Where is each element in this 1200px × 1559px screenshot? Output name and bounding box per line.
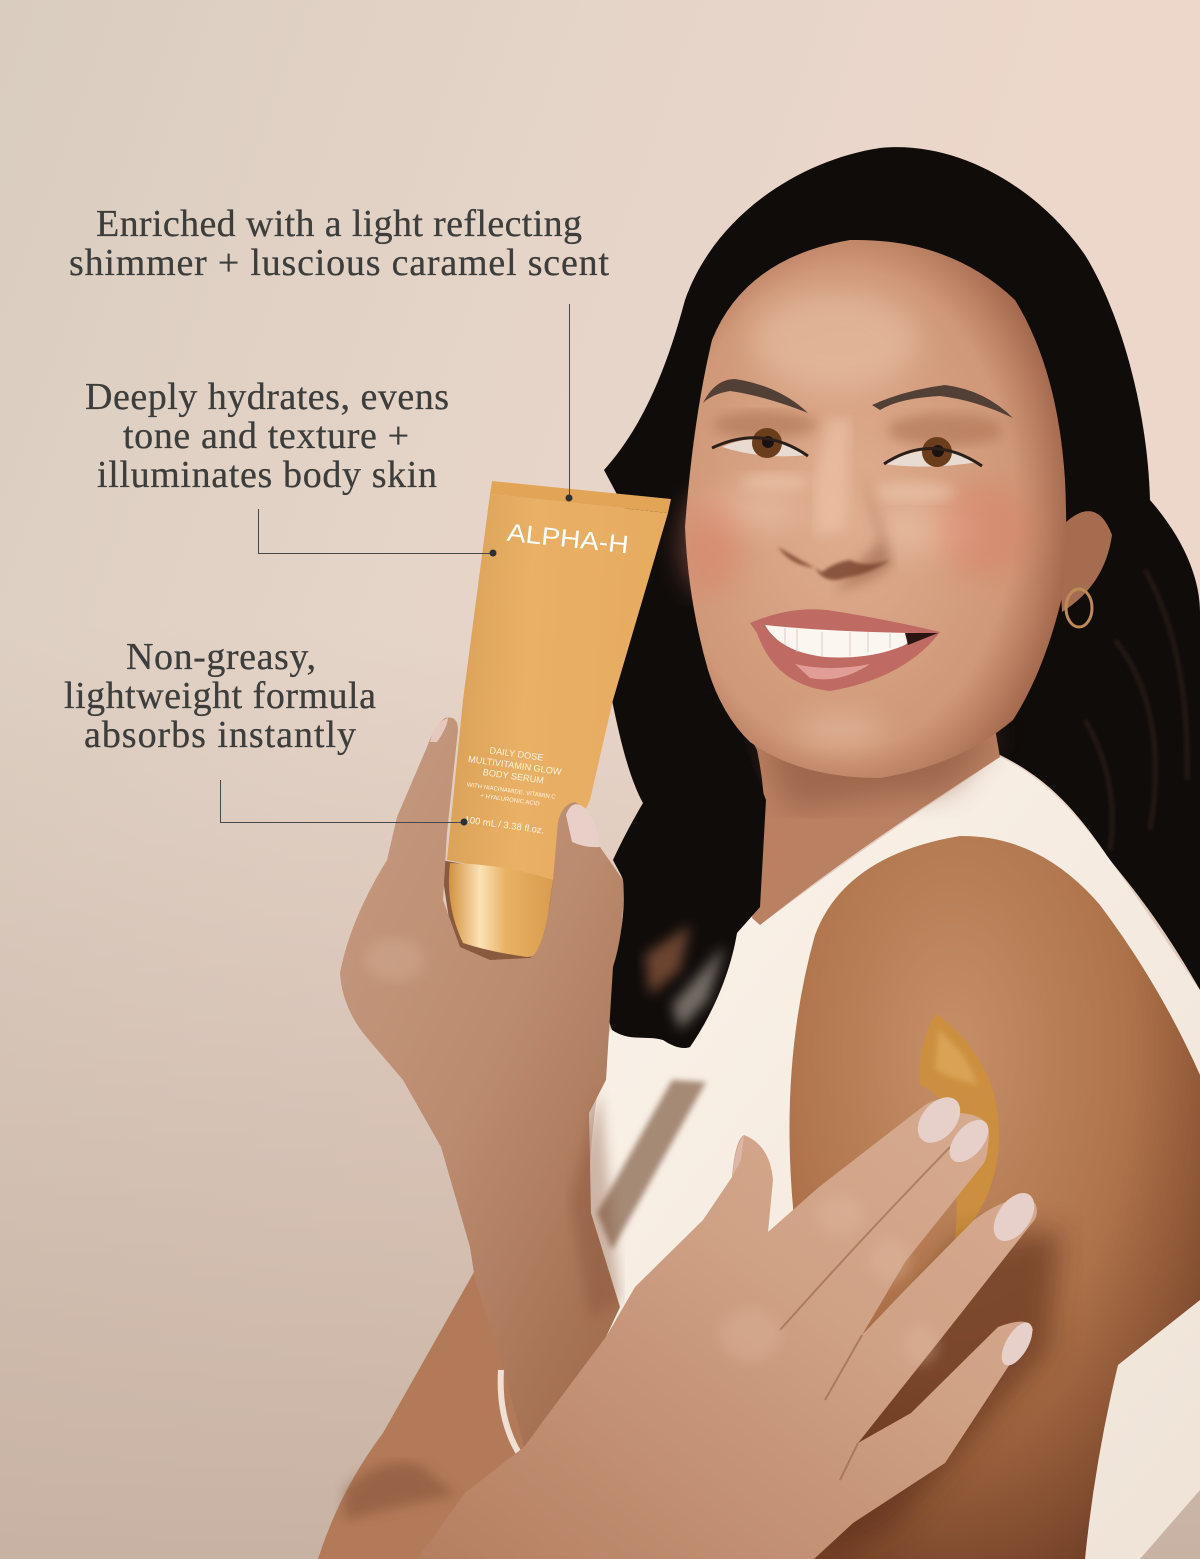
neck shadow	[760, 730, 1000, 810]
callout: hydration	[85, 376, 496, 556]
tube crimp	[490, 481, 671, 513]
hair strands over top	[645, 925, 725, 1030]
knuckle highlight	[365, 938, 425, 982]
under-eye light	[740, 473, 955, 502]
tube body	[447, 494, 668, 880]
product label: MULTIVITAMIN GLOW	[468, 754, 562, 777]
smile	[750, 609, 940, 691]
callout: formula: lightweight formula	[64, 675, 376, 717]
elbow crease	[345, 1463, 456, 1520]
upper arm lower left	[318, 1265, 545, 1559]
bracelet	[501, 1370, 520, 1455]
thumbnail	[566, 804, 600, 847]
callout: shimmer and scent: Enriched with a light reflecting	[96, 203, 582, 245]
callout: shimmer and scent	[69, 203, 609, 502]
serum swatch on arm	[920, 1014, 999, 1240]
white top	[588, 757, 1200, 1559]
wrist shadow	[570, 1090, 620, 1320]
product label: DAILY DOSE	[489, 745, 544, 763]
product label: + HYALURONIC ACID	[480, 793, 541, 808]
finger shadow lines	[780, 1147, 950, 1480]
eye sockets	[713, 411, 1003, 446]
eyebrows	[703, 379, 1013, 418]
product label: 100 mL / 3.38 fl.oz.	[464, 815, 545, 837]
callout: hydration: tone and texture +	[123, 415, 409, 457]
face highlights	[700, 290, 975, 745]
arm-touching hand	[417, 1089, 1043, 1559]
callout: formula	[64, 636, 468, 826]
shoulder and arm	[789, 836, 1200, 1559]
ear and earring	[1058, 511, 1112, 627]
neck	[725, 690, 1000, 925]
hair highlights	[1085, 570, 1187, 850]
callout: formula: absorbs instantly	[84, 714, 356, 756]
nose	[778, 420, 892, 590]
callout: formula: Non-greasy,	[126, 636, 316, 678]
fingernails	[909, 1089, 1043, 1370]
knuckle highlights	[720, 1195, 938, 1365]
cap shadow backing	[440, 860, 560, 965]
holding hand	[340, 718, 623, 1447]
brand name: ALPHA-H	[506, 519, 630, 559]
left eye	[712, 428, 808, 458]
right eye	[884, 437, 982, 467]
tube cap	[449, 863, 553, 957]
finger shadow on arm	[820, 1230, 1060, 1559]
back hair	[604, 147, 1200, 990]
index fingernail	[430, 718, 448, 742]
woman portrait	[318, 147, 1200, 1559]
product label: BODY SERUM	[482, 767, 544, 786]
cheek blush	[682, 482, 1035, 595]
product label	[459, 743, 564, 838]
front hair	[606, 690, 766, 1048]
face	[685, 240, 1066, 778]
callout: hydration: illuminates body skin	[97, 454, 437, 496]
swatch highlights	[935, 1030, 978, 1085]
top fold shadow	[597, 1080, 706, 1250]
callout: hydration: Deeply hydrates, evens	[85, 376, 449, 418]
thumb nail	[733, 1136, 744, 1175]
callout: shimmer and scent: shimmer + luscious caramel scent	[69, 242, 609, 284]
product label: WITH NIACINAMIDE, VITAMIN C	[466, 782, 557, 801]
product tube	[447, 481, 671, 957]
